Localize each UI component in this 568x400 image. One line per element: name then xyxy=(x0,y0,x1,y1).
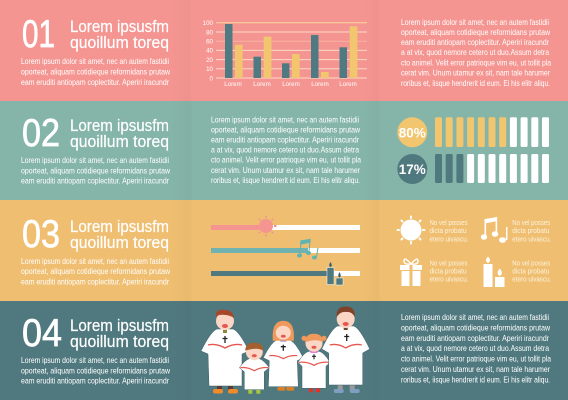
caption: sun: No vel posses xyxy=(430,218,468,227)
text block 01 xyxy=(21,56,171,87)
icon: sun xyxy=(398,216,424,244)
icon: gift xyxy=(400,259,422,286)
17% row: 17% xyxy=(399,161,426,177)
caption: music notes: No vel posses xyxy=(512,218,551,227)
heading 02: quoillum toreq xyxy=(70,132,169,151)
caption: sun: etero uivascu. xyxy=(430,234,468,243)
category labels: Lorem xyxy=(311,81,329,88)
figure: man left xyxy=(201,310,249,394)
axis labels: 20 xyxy=(206,57,214,64)
illustration: choir xyxy=(201,306,370,394)
text block 03: Lorem ipsum dolor sit amet, nec an autem fastidii xyxy=(21,256,169,266)
number 02: 02 xyxy=(22,112,60,155)
panel: section 01 intro xyxy=(21,13,171,87)
heading 02 xyxy=(70,116,169,151)
caption: gift: etero uivascu. xyxy=(430,275,468,284)
text block 04: Lorem ipsum dolor sit amet, nec an autem fastidii xyxy=(21,355,169,365)
heading 04: Lorem ipsusfm xyxy=(70,316,169,335)
category labels: Lorem xyxy=(253,81,271,88)
number 03: 03 xyxy=(22,213,60,256)
heading 04: quoillum toreq xyxy=(70,332,169,351)
caption: sun xyxy=(430,218,468,243)
17% row xyxy=(397,154,549,184)
slider chart xyxy=(211,216,360,285)
icon: music notes xyxy=(481,217,507,243)
caption: candles xyxy=(512,258,551,284)
text block 01: Lorem ipsum dolor sit amet, nec an autem fastidii xyxy=(21,56,169,66)
text block 03: eam eruditi antiopam coplectitur. Aperiri iracundr xyxy=(21,276,169,286)
caption: gift: dicta probatu xyxy=(430,266,466,276)
text block 03: oporteat, aliquam cotidieque reformidans prutaw xyxy=(21,266,171,276)
axis labels: 10 xyxy=(206,66,214,73)
caption: candles: No vel posses xyxy=(512,258,551,268)
panel: section 02 intro xyxy=(21,112,171,186)
text block 04: eam eruditi antiopam coplectitur. Aperiri iracundr xyxy=(21,376,169,386)
percentage chart xyxy=(397,117,549,184)
text block: middle column section 02: cerat vim. Unum utamur ex sit, nam tale harumer xyxy=(211,165,360,175)
caption: music notes: etero uivascu. xyxy=(512,234,551,243)
80% row xyxy=(397,117,549,147)
caption: music notes: dicta probatu xyxy=(512,226,549,235)
axis labels: 0 xyxy=(210,75,214,82)
text block: middle column section 02: Lorem ipsum dolor sit amet, nec an autem fastidii xyxy=(211,114,359,124)
category labels: Lorem xyxy=(224,81,242,88)
text block: middle column section 02: eam eruditi antiopam coplectitur. Aperiri iracundr xyxy=(211,134,359,144)
text block: middle column section 02: a at vix, quod nemore cetero ut duo.Assum detra xyxy=(211,145,359,155)
category labels xyxy=(224,81,357,88)
text block: middle column section 02: roribus et, iisque hendrerit id eum. Ei his elitr aliqu. xyxy=(211,175,360,185)
category labels: Lorem xyxy=(339,81,357,88)
axis labels xyxy=(203,20,214,82)
text block 03 xyxy=(21,256,171,286)
number 04: 04 xyxy=(22,312,62,355)
text block: middle column section 02 xyxy=(211,114,361,185)
heading 01: quoillum toreq xyxy=(70,33,169,52)
bars xyxy=(225,24,357,78)
heading 03: Lorem ipsusfm xyxy=(70,217,169,236)
text block 01: oporteat, aliquam cotidieque reformidans prutaw xyxy=(21,67,171,77)
axis labels: 100 xyxy=(203,20,214,27)
slider: sun xyxy=(211,216,360,236)
figure: girl with long hair xyxy=(263,321,303,391)
text block: middle column section 02: cto animel. Velit error patrioque vim eu, ut tollit pla xyxy=(211,155,361,165)
figure: girl with buns xyxy=(298,334,330,392)
figure: man right xyxy=(322,306,370,393)
axis labels: 80 xyxy=(206,29,214,36)
icon: candles xyxy=(484,256,504,287)
axis labels: 40 xyxy=(206,48,214,55)
text block 01: eam eruditi antiopam coplectitur. Aperiri iracundr xyxy=(21,77,169,87)
heading 01: Lorem ipsusfm xyxy=(70,17,169,36)
category labels: Lorem xyxy=(282,81,300,88)
panel: section 04 intro xyxy=(21,312,171,386)
heading 04 xyxy=(70,316,169,351)
text block 02: eam eruditi antiopam coplectitur. Aperiri iracundr xyxy=(21,176,169,186)
text block: bottom right xyxy=(401,312,551,384)
text block 02: Lorem ipsum dolor sit amet, nec an autem fastidii xyxy=(21,155,169,165)
number 01: 01 xyxy=(22,13,55,56)
text block: middle column section 02: oporteat, aliquam cotidieque reformidans prutaw xyxy=(211,124,361,134)
caption: gift: No vel posses xyxy=(430,258,468,268)
80% row: 80% xyxy=(399,124,426,140)
axis labels: 60 xyxy=(206,38,214,46)
panel: section 03 intro xyxy=(21,213,171,286)
heading 03 xyxy=(70,217,169,252)
text block 02 xyxy=(21,155,171,186)
text block 04: oporteat, aliquam cotidieque reformidans prutaw xyxy=(21,365,171,375)
heading 01 xyxy=(70,17,169,52)
caption: candles: etero uivascu. xyxy=(512,275,551,284)
heading 03: quoillum toreq xyxy=(70,233,169,252)
caption: music notes xyxy=(512,218,551,243)
text block 02: oporteat, aliquam cotidieque reformidans prutaw xyxy=(21,165,171,175)
slider: candles xyxy=(211,262,360,285)
slider: music xyxy=(211,240,360,259)
figure: boy xyxy=(239,343,269,394)
text block 04 xyxy=(21,355,171,386)
caption: candles: dicta probatu xyxy=(512,266,549,276)
heading 02: Lorem ipsusfm xyxy=(70,116,169,135)
text block: top right xyxy=(401,17,551,88)
caption: sun: dicta probatu xyxy=(430,226,466,235)
caption: gift xyxy=(430,258,468,284)
bar chart xyxy=(203,20,367,88)
